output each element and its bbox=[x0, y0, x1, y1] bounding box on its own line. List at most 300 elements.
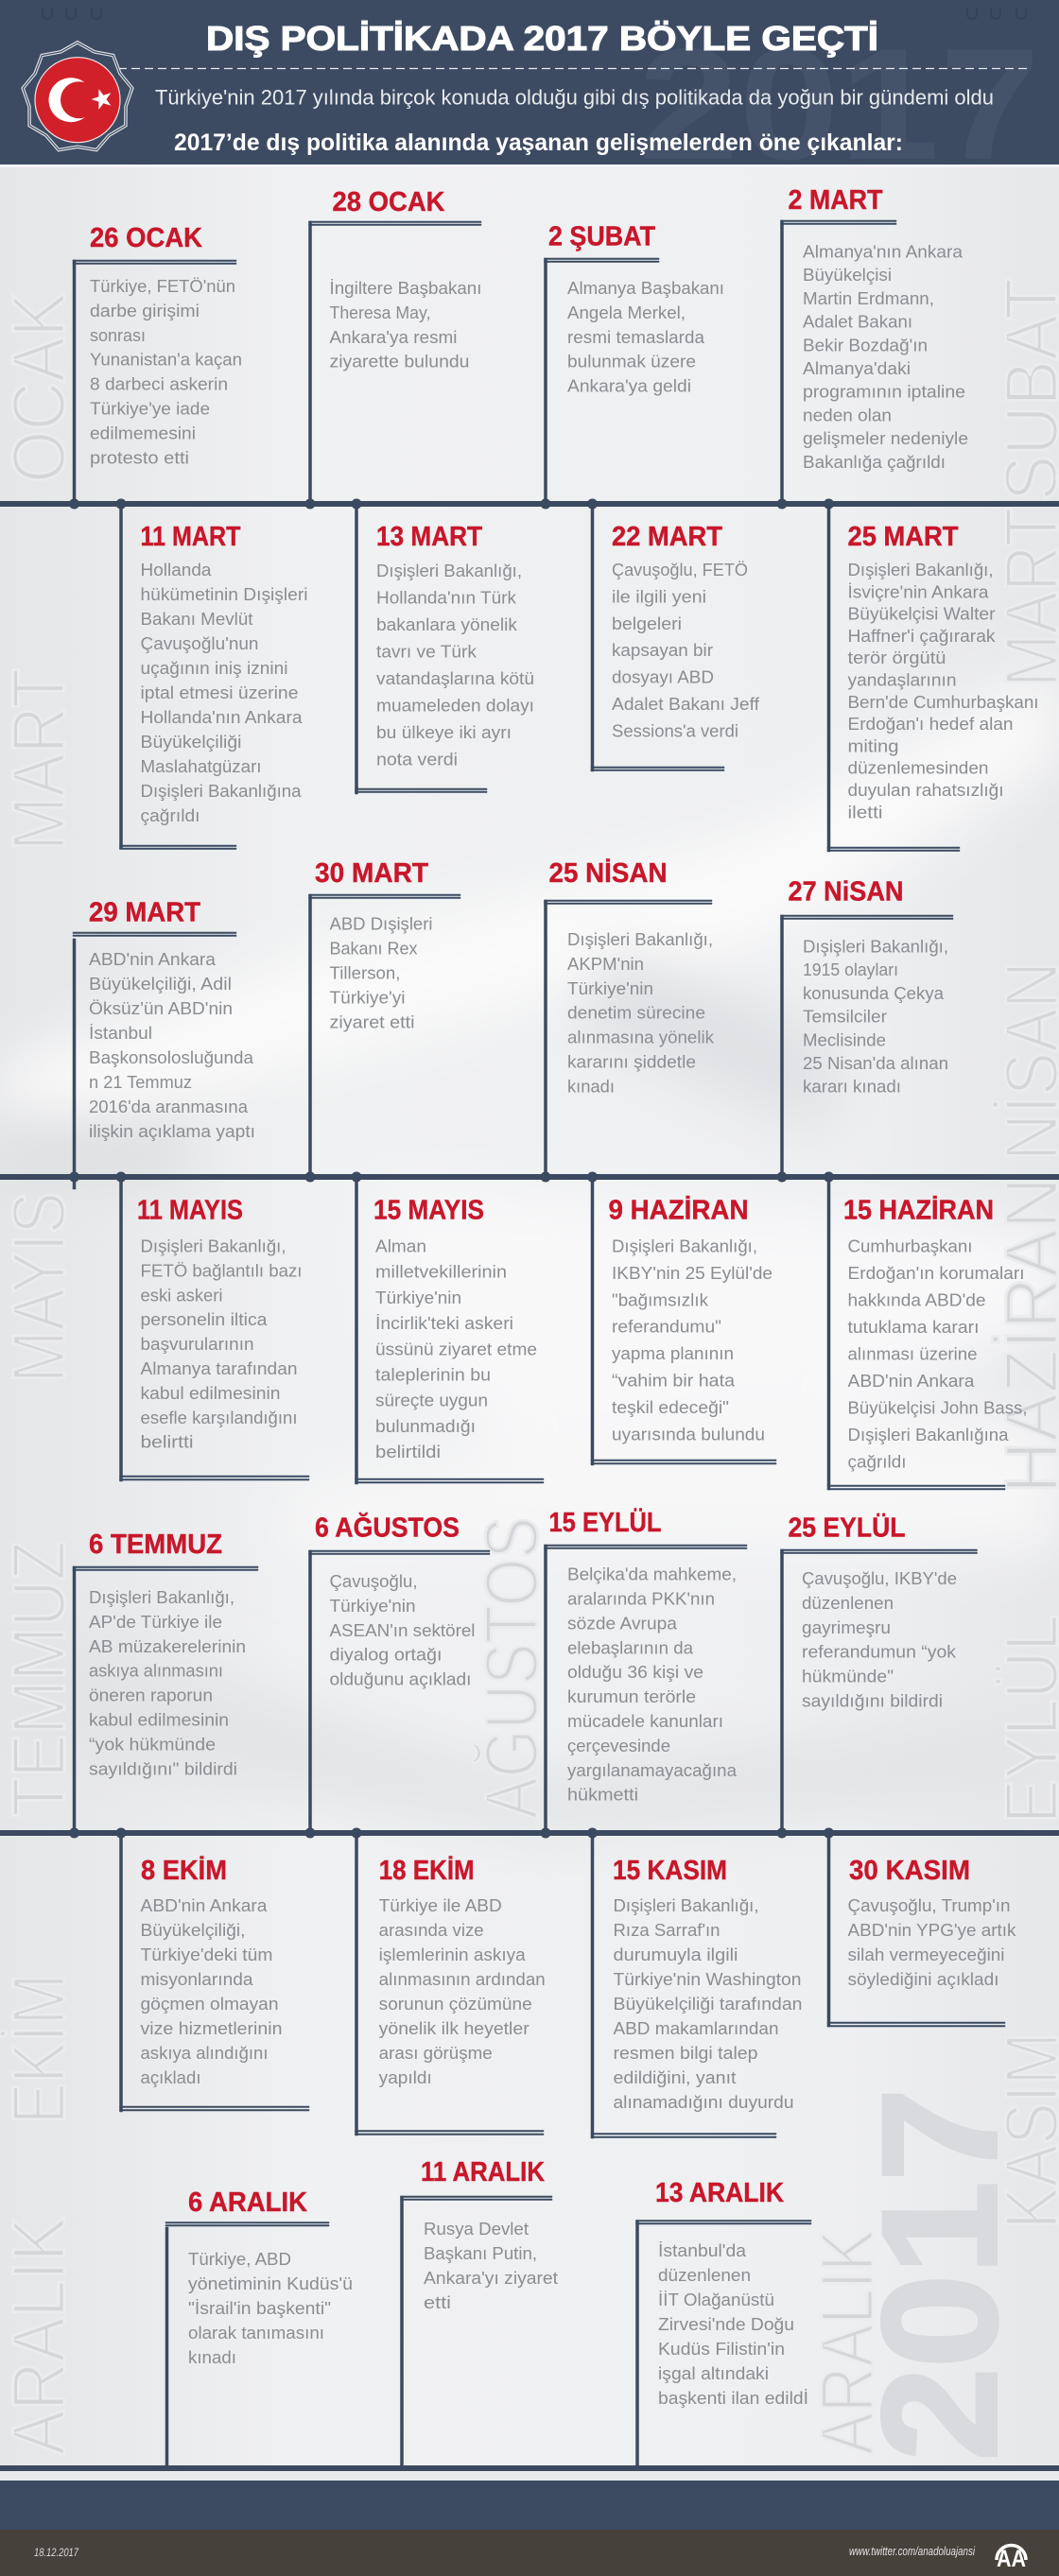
body text: Sessions'a verdi bbox=[612, 720, 738, 740]
body text bbox=[89, 1587, 246, 1778]
body text: Türkiye'ye iade bbox=[90, 399, 210, 418]
body text: Meclisinde bbox=[803, 1029, 886, 1049]
body text: Haffner'i çağırarak bbox=[847, 626, 996, 646]
body text: neden olan bbox=[803, 405, 892, 424]
body text: Cumhurbaşkanı bbox=[847, 1236, 972, 1255]
body text: ABD'nin YPG'ye artık bbox=[847, 1920, 1016, 1940]
event: 6 AĞUSTOS bbox=[308, 1512, 490, 1833]
body text: ABD Dışişleri bbox=[329, 914, 433, 934]
body text: arası görüşme bbox=[379, 2043, 493, 2063]
body text: Almanya'nın Ankara bbox=[803, 242, 964, 261]
body text: ile ilgili yeni bbox=[612, 586, 706, 606]
body text: Tillerson, bbox=[329, 963, 401, 983]
body text: kurumun terörle bbox=[567, 1686, 696, 1706]
body text: yargılanamayacağına bbox=[567, 1760, 738, 1780]
body text: Bakanlığa çağrıldı bbox=[803, 452, 946, 472]
body text: edilmemesini bbox=[90, 423, 196, 442]
body text: İsviçre'nin Ankara bbox=[847, 581, 989, 601]
body text: iptal etmesi üzerine bbox=[140, 683, 299, 702]
body text: olduğu 36 kişi ve bbox=[567, 1662, 703, 1682]
body text bbox=[89, 949, 255, 1141]
body text: tutuklama kararı bbox=[847, 1317, 980, 1337]
timeline axis 3 bbox=[0, 1828, 1059, 1838]
body text: dosyayı ABD bbox=[612, 667, 714, 687]
body text: arasında vize bbox=[379, 1920, 484, 1940]
header band bbox=[0, 0, 1059, 193]
body text bbox=[803, 242, 968, 472]
body text: eski askeri bbox=[140, 1285, 223, 1305]
date: 25 NİSAN bbox=[548, 858, 668, 889]
body text: AP'de Türkiye ile bbox=[89, 1612, 222, 1632]
body text: Almanya tarafından bbox=[140, 1358, 297, 1378]
body text: programının iptaline bbox=[803, 382, 965, 402]
footer date: 18.12.2017 bbox=[34, 2546, 79, 2559]
body text: AKPM'nin bbox=[567, 954, 644, 974]
icon: AA logo: AA bbox=[997, 2546, 1026, 2572]
body text: darbe girişimi bbox=[90, 301, 200, 320]
date: 25 EYLÜL bbox=[789, 1513, 906, 1544]
date: 28 OCAK bbox=[333, 187, 445, 217]
body text: Erdoğan'ın korumaları bbox=[847, 1263, 1025, 1283]
event: 15 MAYIS bbox=[356, 1177, 544, 1484]
event: 25 NİSAN bbox=[545, 858, 715, 1177]
event: 6 ARALIK bbox=[165, 2187, 353, 2474]
body text: kararı kınadı bbox=[803, 1077, 901, 1097]
ornaments: binder marks bbox=[43, 9, 1026, 19]
event: 13 ARALIK bbox=[635, 2178, 811, 2465]
body text: uyarısında bulundu bbox=[612, 1424, 765, 1444]
body text: göçmen olmayan bbox=[140, 1994, 278, 2014]
body text: yapma planının bbox=[612, 1343, 734, 1363]
body text: Çavuşoğlu, bbox=[329, 1571, 418, 1591]
event: 18 EKİM bbox=[356, 1833, 546, 2135]
event: 15 EYLÜL bbox=[545, 1507, 747, 1833]
date: 29 MART bbox=[89, 898, 200, 928]
body text: belgeleri bbox=[612, 614, 682, 633]
timeline axis 4 bbox=[0, 2465, 1059, 2471]
body text: Belçika'da mahkeme, bbox=[567, 1565, 737, 1584]
body text: Dışişleri Bakanlığı, bbox=[613, 1895, 758, 1915]
body text: bakanlara yönelik bbox=[376, 614, 518, 634]
body text: Büyükelçisi John Bass, bbox=[847, 1397, 1027, 1418]
body text: çağrıldı bbox=[140, 805, 200, 825]
body text: “yok hükmünde bbox=[89, 1734, 216, 1754]
body text: yandaşlarının bbox=[847, 669, 957, 690]
body text: AB müzakerelerinin bbox=[89, 1636, 246, 1656]
body text: “vahim bir hata bbox=[612, 1371, 736, 1390]
event: 8 EKİM bbox=[119, 1833, 309, 2112]
body text: alınması üzerine bbox=[847, 1344, 978, 1363]
body text: bulunmak üzere bbox=[567, 352, 696, 372]
body text: ABD makamlarından bbox=[613, 2018, 779, 2038]
body text: konusunda Çekya bbox=[803, 983, 945, 1003]
body text: Bakanı Mevlüt bbox=[140, 609, 253, 629]
body text: Dışişleri Bakanlığı, bbox=[89, 1587, 234, 1607]
event: 11 ARALIK bbox=[401, 2157, 558, 2465]
timeline axis 1 bbox=[0, 499, 1059, 509]
body text: Dışişleri Bakanlığı, bbox=[376, 561, 522, 580]
body text: 1915 olayları bbox=[803, 960, 898, 979]
body text bbox=[612, 1236, 773, 1444]
body text: 2016'da aranmasına bbox=[89, 1097, 249, 1116]
body text: elebaşlarının da bbox=[567, 1637, 694, 1657]
body text: Hollanda'nın Ankara bbox=[140, 707, 303, 727]
body text: belirtti bbox=[140, 1432, 193, 1452]
body text: kınadı bbox=[567, 1076, 615, 1096]
body text bbox=[140, 560, 308, 825]
event: 26 OCAK bbox=[73, 223, 242, 505]
body text: İİT Olağanüstü bbox=[658, 2290, 774, 2309]
body text: referandumun “yok bbox=[802, 1642, 957, 1662]
body text: Bekir Bozdağ'ın bbox=[803, 335, 928, 354]
date: 30 KASIM bbox=[849, 1856, 970, 1886]
body text: bu ülkeye iki ayrı bbox=[376, 722, 512, 742]
date: 25 MART bbox=[847, 522, 959, 552]
body text: Türkiye'yi bbox=[329, 988, 405, 1008]
body text bbox=[847, 1895, 1016, 1989]
body text: Büyükelçiliği, bbox=[140, 1920, 246, 1940]
body text: kabul edilmesinin bbox=[89, 1709, 229, 1730]
body text bbox=[847, 560, 1038, 821]
body text: taleplerinin bu bbox=[375, 1365, 491, 1384]
date: 26 OCAK bbox=[90, 223, 202, 253]
body text: ziyarette bulundu bbox=[329, 352, 469, 372]
event: 25 MART bbox=[827, 504, 1038, 852]
event: 30 MART bbox=[308, 858, 460, 1177]
body text: üssünü ziyaret etme bbox=[375, 1339, 537, 1358]
body text: ilişkin açıklama yaptı bbox=[89, 1121, 255, 1141]
body text: 8 darbeci askerin bbox=[90, 374, 228, 394]
body text: "bağımsızlık bbox=[612, 1289, 709, 1309]
body text: Türkiye'nin bbox=[567, 978, 653, 998]
body text: ASEAN'ın sektörel bbox=[329, 1620, 475, 1640]
body text: Adalet Bakanı Jeff bbox=[612, 694, 760, 714]
body text: askıya alındığını bbox=[140, 2043, 269, 2063]
body text: yönelik ilk heyetler bbox=[379, 2018, 530, 2038]
body text: gelişmeler nedeniyle bbox=[803, 428, 968, 448]
body text: Ankara'yı ziyaret bbox=[424, 2268, 558, 2288]
body text: işlemlerinin askıya bbox=[379, 1945, 526, 1964]
body text: muameleden dolayı bbox=[376, 696, 534, 715]
body text: uçağının iniş iznini bbox=[140, 658, 287, 678]
body text: Theresa May, bbox=[329, 303, 431, 322]
body text: Almanya'daki bbox=[803, 358, 911, 378]
body text: silah vermeyeceğini bbox=[847, 1945, 1004, 1964]
date: 2 ŞUBAT bbox=[548, 222, 655, 252]
date: 2 MART bbox=[789, 185, 883, 216]
body text: Angela Merkel, bbox=[567, 303, 686, 322]
body text: Büyükelçiliği, Adil bbox=[89, 974, 232, 994]
body text bbox=[847, 1236, 1027, 1471]
body text bbox=[379, 1895, 546, 2087]
body text: açıkladı bbox=[140, 2067, 200, 2087]
body text: alınmasının ardından bbox=[379, 1969, 546, 1989]
body text: resmen bilgi talep bbox=[613, 2043, 758, 2063]
body text bbox=[802, 1568, 957, 1711]
body text bbox=[567, 278, 724, 396]
body text: milletvekillerinin bbox=[375, 1262, 507, 1282]
event: 30 KASIM bbox=[827, 1833, 1016, 2027]
body text: Türkiye'nin bbox=[329, 1596, 416, 1616]
event: 9 HAZİRAN bbox=[591, 1177, 776, 1465]
body text: Öksüz'ün ABD'nin bbox=[89, 998, 233, 1018]
body text: Dışişleri Bakanlığı, bbox=[140, 1236, 286, 1255]
body text: söylediğini açıkladı bbox=[847, 1969, 998, 1989]
body text bbox=[424, 2219, 558, 2312]
body text: ABD'nin Ankara bbox=[847, 1371, 975, 1391]
body text: duyulan rahatsızlığı bbox=[847, 780, 1004, 800]
body text: Dışişleri Bakanlığı, bbox=[847, 560, 993, 579]
body text: Ankara'ya geldi bbox=[567, 376, 691, 396]
body text: Zirvesi'nde Doğu bbox=[658, 2314, 794, 2334]
body text: alınmasına yönelik bbox=[567, 1028, 715, 1047]
body text: olarak tanımasını bbox=[188, 2323, 324, 2343]
event: 22 MART bbox=[591, 504, 760, 771]
body text bbox=[375, 1236, 537, 1461]
body text: Türkiye'nin bbox=[375, 1288, 461, 1307]
header watermark: 2017: 2017 bbox=[638, 15, 1040, 193]
event: 11 MAYIS bbox=[119, 1177, 309, 1481]
body text: Türkiye'nin Washington bbox=[613, 1969, 802, 1989]
body text: miting bbox=[847, 735, 898, 755]
body text: başvurularının bbox=[140, 1334, 253, 1354]
body text: personelin iltica bbox=[140, 1309, 268, 1329]
footer url: www.twitter.com/anadoluajansi bbox=[849, 2544, 976, 2558]
body text: sözde Avrupa bbox=[567, 1613, 678, 1633]
body text: sorunun çözümüne bbox=[379, 1994, 532, 2014]
body text: Başkonsolosluğunda bbox=[89, 1047, 254, 1067]
body text: misyonlarında bbox=[140, 1969, 253, 1989]
body text bbox=[329, 1571, 475, 1689]
body text: kararını şiddetle bbox=[567, 1051, 696, 1072]
body text: esefle karşılandığını bbox=[140, 1408, 297, 1427]
body text: Erdoğan'ı hedef alan bbox=[847, 714, 1014, 734]
event: 6 TEMMUZ bbox=[73, 1530, 258, 1833]
body text bbox=[140, 1895, 282, 2087]
body text bbox=[613, 1895, 802, 2112]
body text: belirtildi bbox=[375, 1442, 441, 1461]
body text: alınamadığını duyurdu bbox=[613, 2092, 794, 2112]
body text: Temsilciler bbox=[803, 1007, 887, 1027]
date: 27 NiSAN bbox=[789, 876, 904, 907]
body text: n 21 Temmuz bbox=[89, 1072, 192, 1092]
body text: Almanya Başbakanı bbox=[567, 278, 724, 298]
event: 28 OCAK bbox=[308, 187, 482, 505]
body text: başkenti ilan edildİ bbox=[658, 2388, 808, 2408]
event: 2 ŞUBAT bbox=[545, 222, 724, 505]
date: 11 MART bbox=[140, 522, 241, 552]
body text: Maslahatgüzarı bbox=[140, 756, 261, 776]
body text: kınadı bbox=[188, 2347, 236, 2367]
body text: yapıldı bbox=[379, 2067, 432, 2087]
body text: Ankara'ya resmi bbox=[329, 327, 458, 347]
body text: Dışişleri Bakanlığı, bbox=[612, 1236, 757, 1255]
date: 15 EYLÜL bbox=[548, 1507, 662, 1538]
body text: süreçte uygun bbox=[375, 1391, 488, 1410]
body text: İstanbul'da bbox=[658, 2240, 747, 2260]
date: 11 MAYIS bbox=[137, 1196, 243, 1226]
body text: hükümetinin Dışişleri bbox=[140, 584, 308, 604]
body text: Başkanı Putin, bbox=[424, 2243, 537, 2263]
body text: "İsrail'in başkenti" bbox=[188, 2298, 331, 2318]
body text: diyalog ortağı bbox=[329, 1645, 443, 1665]
date: 30 MART bbox=[315, 858, 428, 889]
body text: gayrimeşru bbox=[802, 1617, 891, 1637]
date: 15 KASIM bbox=[613, 1856, 727, 1886]
body text: mücadele kanunları bbox=[567, 1711, 723, 1731]
body text: Bakanı Rex bbox=[329, 939, 418, 959]
body text: aralarında PKK'nın bbox=[567, 1588, 715, 1609]
body text: Alman bbox=[375, 1236, 426, 1255]
body text bbox=[658, 2240, 808, 2408]
watermark: 2017 rotated: 2017 bbox=[849, 2088, 1031, 2461]
body text: Türkiye'deki tüm bbox=[140, 1945, 272, 1964]
body text: iletti bbox=[847, 802, 883, 821]
event: 15 KASIM bbox=[591, 1833, 802, 2138]
icon: Turkish flag badge bbox=[22, 42, 133, 151]
body text: referandumu" bbox=[612, 1317, 721, 1337]
body text bbox=[188, 2249, 353, 2367]
body text: Türkiye, FETÖ'nün bbox=[90, 276, 235, 296]
body text bbox=[567, 929, 715, 1096]
body text: sayıldığını bildirdi bbox=[802, 1690, 943, 1711]
date: 6 AĞUSTOS bbox=[315, 1512, 460, 1544]
body text: edildiğini, yanıt bbox=[613, 2067, 736, 2087]
body text: Çavuşoğlu'nun bbox=[140, 633, 259, 653]
body text: ABD'nin Ankara bbox=[140, 1895, 268, 1915]
body text: Büyükelçisi bbox=[803, 265, 892, 285]
body text: Yunanistan'a kaçan bbox=[90, 350, 242, 370]
body text: hükmetti bbox=[567, 1785, 638, 1805]
body text: Türkiye ile ABD bbox=[379, 1895, 502, 1915]
month watermarks: AĞUSTOS bbox=[469, 1517, 553, 1819]
date: 6 ARALIK bbox=[188, 2187, 307, 2218]
body text: Büyükelçiliği tarafından bbox=[613, 1994, 802, 2014]
event: 2 MART bbox=[781, 185, 968, 505]
body text: terör örgütü bbox=[847, 648, 946, 667]
body text: sonrası bbox=[90, 325, 146, 345]
body text: sayıldığını" bildirdi bbox=[89, 1758, 237, 1778]
body text: Hollanda bbox=[140, 560, 212, 579]
body text: Büyükelçisi Walter bbox=[847, 604, 995, 624]
body text: Bern'de Cumhurbaşkanı bbox=[847, 692, 1038, 712]
event: 27 NiSAN bbox=[781, 876, 953, 1177]
body text: düzenlenen bbox=[802, 1593, 894, 1613]
body text: Büyükelçiliği bbox=[140, 732, 242, 752]
body text: IKBY'nin 25 Eylül'de bbox=[612, 1263, 773, 1283]
body text: İncirlik'teki askeri bbox=[375, 1313, 513, 1333]
section heading: 2017’de dış politika alanında yaşanan gelişmelerden öne çıkanlar: bbox=[174, 130, 903, 156]
body text: hakkında ABD'de bbox=[847, 1289, 985, 1310]
body text: yönetiminin Kudüs'ü bbox=[188, 2273, 353, 2293]
date: 9 HAZİRAN bbox=[609, 1196, 749, 1226]
body text: Türkiye, ABD bbox=[188, 2249, 291, 2269]
date: 11 ARALIK bbox=[421, 2157, 545, 2187]
body text: Kudüs Filistin'in bbox=[658, 2339, 785, 2359]
body text: etti bbox=[424, 2292, 451, 2312]
month watermarks: ARALIK bbox=[805, 2229, 889, 2455]
event: 29 MART bbox=[73, 898, 255, 1189]
date: 13 ARALIK bbox=[655, 2178, 784, 2208]
body text bbox=[329, 914, 433, 1032]
body text: işgal altındaki bbox=[658, 2363, 769, 2383]
body text: Dışişleri Bakanlığına bbox=[140, 781, 302, 801]
body text bbox=[90, 276, 242, 467]
body text: Martin Erdmann, bbox=[803, 288, 934, 308]
date: 13 MART bbox=[376, 522, 482, 552]
body text: Dışişleri Bakanlığına bbox=[847, 1425, 1009, 1444]
body text bbox=[567, 1565, 738, 1805]
body text: Hollanda'nın Türk bbox=[376, 588, 517, 607]
body text: Rıza Sarraf'ın bbox=[613, 1920, 720, 1940]
body text: teşkil edeceği" bbox=[612, 1397, 729, 1417]
dashed divider bbox=[118, 68, 1027, 70]
body text bbox=[140, 1236, 303, 1452]
body text bbox=[612, 560, 760, 740]
date: 15 MAYIS bbox=[373, 1196, 484, 1226]
body text: FETÖ bağlantılı bazı bbox=[140, 1260, 303, 1280]
body text: tavrı ve Türk bbox=[376, 641, 477, 662]
date: 18 EKİM bbox=[379, 1856, 475, 1886]
date: 6 TEMMUZ bbox=[89, 1530, 222, 1560]
body text: vize hizmetlerinin bbox=[140, 2018, 282, 2038]
body text: Çavuşoğlu, FETÖ bbox=[612, 560, 748, 579]
event: 13 MART bbox=[356, 504, 534, 794]
footer band bbox=[0, 2471, 1059, 2576]
body text: Rusya Devlet bbox=[424, 2219, 529, 2239]
date: 15 HAZİRAN bbox=[843, 1196, 994, 1226]
title: DIŞ POLİTİKADA 2017 BÖYLE GEÇTİ bbox=[206, 19, 878, 58]
body text: bulunmadığı bbox=[375, 1416, 476, 1436]
date: 22 MART bbox=[612, 522, 722, 552]
body text bbox=[376, 561, 534, 769]
body text: olduğunu açıkladı bbox=[329, 1669, 471, 1689]
body text: kabul edilmesinin bbox=[140, 1383, 280, 1403]
body text: çağrıldı bbox=[847, 1452, 906, 1471]
body text: vatandaşlarına kötü bbox=[376, 668, 534, 688]
body text: öneren raporun bbox=[89, 1686, 213, 1705]
event: 11 MART bbox=[119, 504, 308, 849]
body text: ziyaret etti bbox=[329, 1012, 414, 1032]
body text: Dışişleri Bakanlığı, bbox=[567, 929, 713, 949]
body text: resmi temaslarda bbox=[567, 327, 705, 347]
body text: ABD'nin Ankara bbox=[89, 949, 217, 969]
event: 15 HAZİRAN bbox=[827, 1177, 1027, 1490]
body text: hükmünde" bbox=[802, 1667, 894, 1686]
body text bbox=[803, 936, 948, 1097]
timeline axis 2 bbox=[0, 1172, 1059, 1182]
body text: İngiltere Başbakanı bbox=[329, 278, 482, 298]
body text: düzenlemesinden bbox=[847, 758, 989, 778]
body text: nota verdi bbox=[376, 749, 458, 769]
body text bbox=[329, 278, 482, 372]
body text: kapsayan bir bbox=[612, 640, 713, 660]
body text: askıya alınmasını bbox=[89, 1661, 223, 1681]
subtitle: Türkiye'nin 2017 yılında birçok konuda olduğu gibi dış politikada da yoğun bir gündemi oldu bbox=[155, 86, 994, 110]
body text: denetim sürecine bbox=[567, 1003, 705, 1023]
body text: Dışişleri Bakanlığı, bbox=[803, 936, 948, 957]
date: 8 EKİM bbox=[141, 1856, 227, 1886]
body text: düzenlenen bbox=[658, 2265, 751, 2285]
body text: durumuyla ilgili bbox=[613, 1945, 738, 1964]
body text: Çavuşoğlu, IKBY'de bbox=[802, 1568, 957, 1588]
body text: protesto etti bbox=[90, 447, 189, 467]
body text: Adalet Bakanı bbox=[803, 312, 912, 332]
event: 25 EYLÜL bbox=[781, 1513, 978, 1833]
body text: çerçevesinde bbox=[567, 1736, 670, 1755]
body text: İstanbul bbox=[89, 1023, 152, 1043]
body text: Çavuşoğlu, Trump'ın bbox=[847, 1895, 1010, 1915]
